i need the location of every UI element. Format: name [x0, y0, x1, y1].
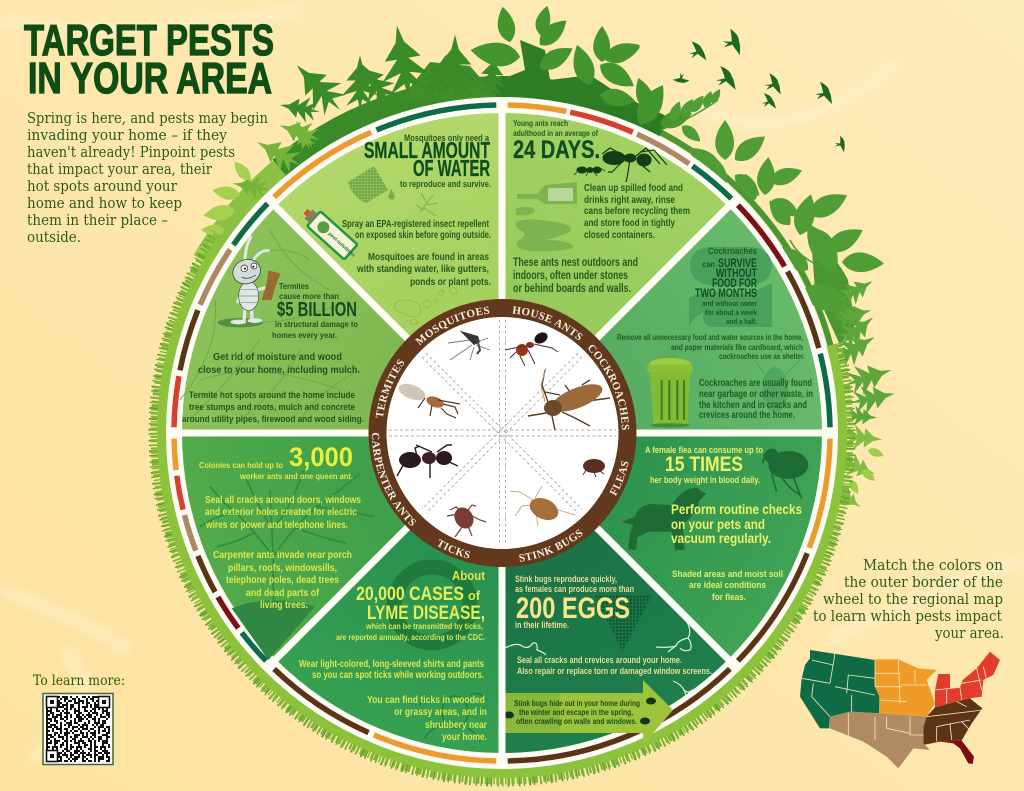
- text: mosquitoes: OF WATER: [413, 155, 490, 181]
- text: house ants: 24 DAYS.: [513, 136, 600, 164]
- text: cockroaches: Cockroaches are usually found: [699, 378, 812, 389]
- wheel: [166, 97, 838, 769]
- text: fleas: are ideal conditions: [689, 580, 766, 591]
- text: termites: cause more than: [279, 292, 339, 301]
- icon: wall cracks: [505, 622, 700, 695]
- text: cockroaches: cockroaches use as shelter.: [719, 352, 805, 361]
- text: carpenter ants: worker ants and one queen ant.: [239, 471, 353, 481]
- icon: mesh cup: [348, 166, 395, 203]
- text: stink bugs: Also repair or replace torn or damaged window screens.: [517, 666, 712, 676]
- text: ticks: or grassy areas, and in: [394, 707, 487, 718]
- icon: target ring: [394, 567, 470, 643]
- hub labels: MOSQUITOES: [415, 306, 490, 346]
- text: ticks: which can be transmitted by ticks,: [365, 621, 483, 631]
- region: florida: [940, 741, 974, 764]
- text: cockroaches: and without water: [702, 299, 757, 308]
- insect: stink bug: [510, 486, 575, 526]
- hub labels: CARPENTER ANTS: [372, 432, 416, 526]
- text: ticks: About: [452, 568, 486, 583]
- birds: [672, 27, 845, 153]
- text: carpenter ants: living trees.: [260, 600, 308, 611]
- panel: fleas: [622, 445, 808, 625]
- intro text: [27, 109, 268, 246]
- text: ticks: of: [468, 588, 481, 603]
- text: carpenter ants: 3,000: [289, 442, 353, 472]
- text: mosquitoes: [342, 133, 491, 288]
- state lines: [802, 653, 987, 742]
- text: house ants: drinks right away, rinse: [584, 194, 675, 206]
- leaf mass: [202, 87, 835, 362]
- regional map: [800, 650, 1000, 768]
- text: stink bugs: as females can produce more than: [515, 584, 634, 594]
- icon: flea and dog silhouettes: [622, 449, 808, 550]
- icon: tree with roots: [200, 470, 373, 660]
- text: cockroaches: [617, 246, 813, 421]
- wood grain cracks: [180, 230, 360, 420]
- text: termites: in structural damage to: [275, 319, 358, 329]
- text: house ants: Young ants reach: [513, 118, 568, 128]
- map instructions: [813, 556, 1004, 642]
- map instructions: the outer border of the: [844, 573, 1003, 591]
- text: cockroaches: and a half.: [726, 317, 757, 326]
- top-right leaves: [469, 4, 695, 132]
- hub labels: [372, 306, 630, 562]
- text: cockroaches: crevices around the home.: [699, 410, 795, 421]
- insect: termite: [396, 381, 460, 418]
- icon: green arrow: [502, 680, 673, 745]
- icon: bottle and spill: [516, 182, 577, 251]
- text: ticks: so you can spot ticks while working outdoors.: [312, 670, 484, 681]
- text: stink bugs: Stink bugs hide out in your home during: [514, 698, 640, 708]
- text: termites: Termites: [279, 282, 309, 291]
- dashed cut lines: [389, 320, 616, 546]
- text: mosquitoes: Mosquitoes are found in areas: [368, 251, 489, 263]
- text: fleas: Shaded areas and moist soil: [672, 569, 783, 580]
- text: ticks: 20,000 CASES: [356, 584, 464, 605]
- text: fleas: [645, 445, 802, 603]
- text: stink bugs: the winter and escape in the spring,: [519, 707, 633, 717]
- text: house ants: or behind boards and walls.: [513, 283, 631, 295]
- insect: flea: [583, 459, 605, 477]
- text: house ants: Clean up spilled food and: [584, 182, 683, 194]
- text: termites: [182, 282, 364, 424]
- text: cockroaches: Cockroaches: [708, 246, 757, 256]
- icon: water puddle: [394, 288, 456, 324]
- hub labels: FLEAS: [609, 461, 628, 496]
- icon: faint tick: [420, 693, 486, 742]
- hub labels: STINK BUGS: [519, 529, 582, 562]
- text: ticks: are reported annually, according to the CDC.: [336, 632, 485, 642]
- panel: house ants: [513, 118, 690, 295]
- icon: grass sprig: [416, 193, 438, 216]
- text: termites: close to your home, including mulch.: [198, 365, 360, 376]
- left ferns: [231, 112, 325, 202]
- text: ticks: LYME DISEASE,: [367, 603, 485, 624]
- region: midwest: [875, 659, 937, 717]
- text: stink bugs: [514, 574, 712, 726]
- text: house ants: [513, 118, 690, 295]
- text: carpenter ants: Seal all cracks around doors, windows: [205, 495, 361, 506]
- text: fleas: 15 TIMES: [665, 453, 743, 476]
- text: termites: tree stumps and roots, mulch and concrete: [189, 402, 355, 412]
- panel: ticks: [299, 567, 487, 743]
- text: cockroaches: Remove all unnecessary food and water sources in the home,: [617, 333, 803, 342]
- text: cockroaches: SURVIVE: [718, 256, 757, 270]
- text: cockroaches: can: [702, 259, 715, 269]
- intro text: hot spots around your: [27, 177, 178, 195]
- icon: faint roach: [755, 360, 800, 413]
- text: carpenter ants: Carpenter ants invade near porch: [213, 550, 352, 561]
- text: cockroaches: for about a week: [705, 308, 758, 317]
- text: termites: Get rid of moisture and wood: [213, 352, 342, 363]
- text: house ants: cans before recycling them: [584, 205, 690, 217]
- text: ticks: Wear light-colored, long-sleeved shirts and pants: [299, 659, 484, 670]
- intro text: haven't already! Pinpoint pests: [27, 143, 235, 161]
- text: cockroaches: near garbage or other waste, in: [699, 389, 813, 400]
- to learn more: To learn more:: [33, 673, 125, 689]
- icon: cartoon termite: [217, 237, 281, 327]
- region: northeast: [935, 652, 1000, 707]
- text: cockroaches: and paper materials like cardboard, which: [671, 343, 803, 352]
- text: fleas: Perform routine checks: [671, 502, 802, 517]
- text: mosquitoes: to reproduce and survive.: [400, 179, 491, 189]
- text: cockroaches: FOOD FOR: [712, 276, 757, 290]
- map instructions: Match the colors on: [863, 556, 1003, 574]
- hub labels: TICKS: [438, 538, 470, 558]
- text: mosquitoes: Mosquitoes only need a: [404, 133, 490, 144]
- hub labels: TERMITES: [376, 359, 404, 418]
- intro text: that impact your area, their: [27, 160, 213, 178]
- panel: mosquitoes: [299, 133, 491, 324]
- text: mosquitoes: ponds or plant pots.: [410, 276, 491, 288]
- text: house ants: indoors, often under stones: [513, 270, 628, 282]
- QR code: [43, 694, 113, 764]
- text: ticks: your home.: [442, 732, 487, 743]
- icon: speech bubble shapes: [689, 247, 772, 327]
- outer colour border: [174, 105, 830, 761]
- text: house ants: These ants nest outdoors and: [513, 257, 638, 269]
- insect: house ant: [505, 330, 558, 366]
- map instructions: to learn which pests impact: [813, 607, 1002, 625]
- hub labels: COCKROACHES: [588, 344, 630, 430]
- text: carpenter ants: telephone poles, dead trees: [226, 575, 339, 586]
- text: cockroaches: TWO MONTHS: [695, 286, 757, 300]
- text: carpenter ants: and dead parts of: [246, 588, 320, 599]
- text: ticks: [299, 568, 487, 743]
- dark top ferns: [278, 21, 508, 125]
- text: house ants: adulthood in an average of: [513, 128, 598, 138]
- text: fleas: for fleas.: [712, 592, 746, 603]
- text: termites: Termite hot spots around the home include: [189, 390, 355, 400]
- region: southeast: [923, 698, 982, 745]
- icon: repellent can: [299, 204, 362, 263]
- region: west: [800, 650, 879, 728]
- text: fleas: vacuum regularly.: [671, 531, 771, 546]
- text: termites: around utility pipes, firewood and wood siding.: [182, 414, 364, 424]
- panel: termites: [180, 230, 364, 424]
- intro text: outside.: [27, 228, 81, 246]
- text: carpenter ants: wires or power and telephone lines.: [205, 520, 348, 531]
- text: stink bugs: in their lifetime.: [515, 620, 569, 630]
- intro text: home and how to keep: [27, 194, 182, 212]
- text: carpenter ants: and exterior holes created for electric: [205, 507, 357, 518]
- text: mosquitoes: on exposed skin before going outside.: [355, 230, 491, 241]
- intro text: invading your home – if they: [27, 126, 227, 144]
- region: south: [830, 712, 930, 768]
- panel: cockroaches: [617, 246, 813, 427]
- intro text: them in their place –: [27, 211, 168, 229]
- icon: repellent can: pest-solutions: [327, 231, 356, 259]
- insect: carpenter ant: [397, 445, 458, 478]
- text: cockroaches: WITHOUT: [716, 266, 757, 280]
- sector fills: [182, 113, 822, 753]
- white dividers: [169, 100, 835, 766]
- text: mosquitoes: SMALL AMOUNT: [364, 137, 490, 163]
- text: ticks: You can find ticks in wooded: [367, 695, 485, 706]
- insect: mosquito: [448, 331, 490, 360]
- icon: faint sunburst: [673, 520, 778, 625]
- right branch leaves: [660, 100, 830, 270]
- text: stink bugs: Stink bugs reproduce quickly,: [515, 574, 617, 584]
- text: stink bugs: Seal all cracks and crevices around your home.: [517, 655, 682, 665]
- foliage around the wheel: [189, 4, 898, 515]
- text: cockroaches: the kitchen and in cracks and: [699, 400, 807, 411]
- panel: carpenter ants: [199, 442, 373, 660]
- text: house ants: and store food in tightly: [584, 217, 675, 229]
- title: [24, 16, 274, 103]
- panel: stink bugs: [502, 574, 712, 745]
- text: carpenter ants: pillars, roofs, windowsills,: [228, 563, 337, 574]
- text: mosquitoes: Spray an EPA-registered insect repellent: [342, 219, 490, 230]
- grass ring: [148, 230, 856, 786]
- text: mosquitoes: with standing water, like gutters,: [356, 263, 489, 275]
- right ferns: [828, 271, 898, 428]
- insect: tick: [447, 504, 486, 537]
- text: house ants: closed containers.: [584, 229, 655, 241]
- central hub: [368, 299, 636, 567]
- text: ticks: shrubbery near: [425, 720, 487, 731]
- text: stink bugs: often crawling on walls and windows.: [516, 716, 637, 726]
- insect: cockroach: [528, 368, 610, 430]
- title: TARGET PESTS: [24, 16, 274, 65]
- white wheel disc: [166, 97, 838, 769]
- text: fleas: A female flea can consume up to: [645, 445, 764, 455]
- text: carpenter ants: [199, 442, 361, 611]
- text: fleas: on your pets and: [671, 517, 765, 532]
- icon: ant silhouettes: [574, 148, 667, 182]
- title: IN YOUR AREA: [28, 54, 272, 103]
- text: termites: $5 BILLION: [277, 299, 357, 321]
- text: carpenter ants: Colonies can hold up to: [199, 460, 283, 470]
- intro text: Spring is here, and pests may begin: [27, 109, 268, 127]
- icon: trash can: [647, 356, 693, 427]
- text: stink bugs: 200 EGGS: [516, 592, 630, 625]
- map instructions: your area.: [934, 624, 1004, 642]
- text: fleas: her body weight in blood daily.: [650, 475, 760, 485]
- map instructions: wheel to the regional map: [823, 590, 1003, 608]
- icon: egg triangle: [595, 595, 652, 652]
- hub labels: HOUSE ANTS: [512, 306, 583, 340]
- text: termites: homes every year.: [272, 330, 337, 340]
